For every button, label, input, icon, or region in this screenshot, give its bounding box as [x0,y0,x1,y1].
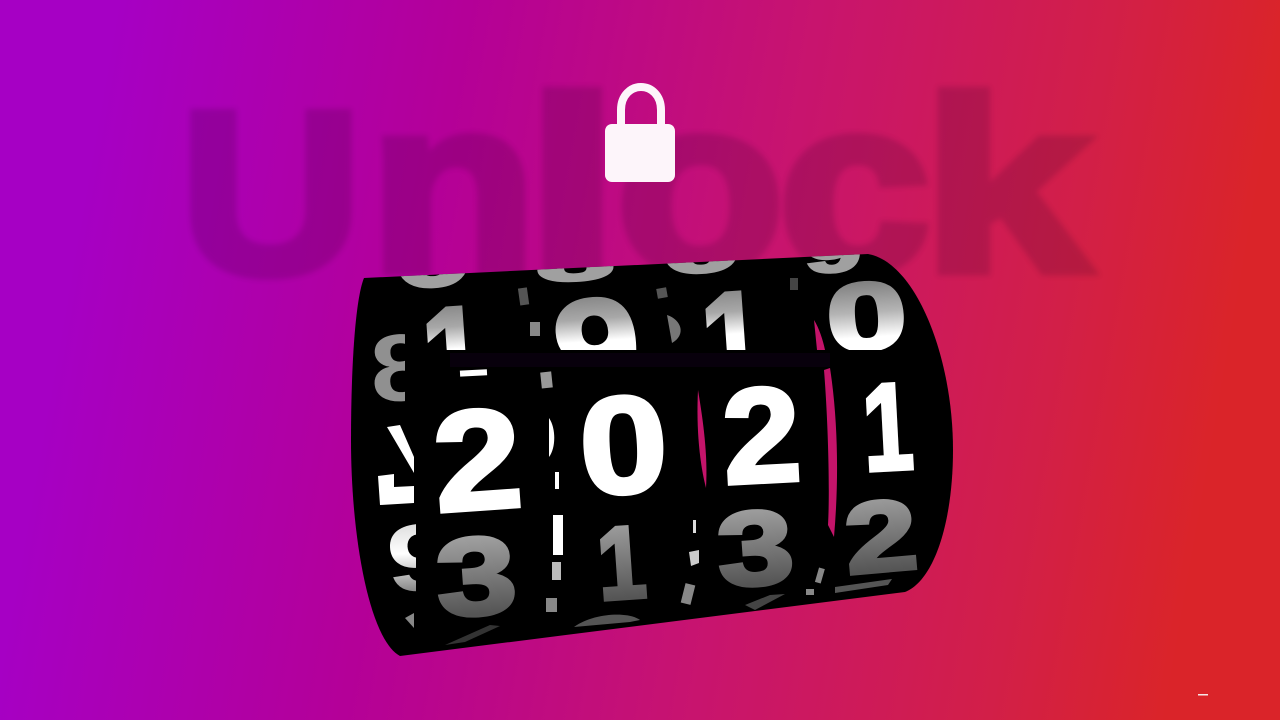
heading: Unlock ghost word: U [180,64,362,323]
center row digits 2 0 2 1: 0 [576,367,671,525]
partially hidden digits: top edge row [400,254,860,288]
small slivers between reels [405,278,892,645]
center row digits 2 0 2 1: 1 [859,358,916,498]
upper row digits 1 9 1 0 [426,280,904,350]
heading: Unlock ghost word: o [616,46,785,324]
heading: Unlock ghost word: c [778,46,931,324]
icon: padlock [605,87,675,182]
dark band across reels [450,353,830,367]
upper row digits 1 9 1 0: 1 [417,277,490,432]
reel gap slits [697,320,837,537]
combination cylinder [351,254,953,656]
heading: Unlock ghost word [180,46,1091,324]
small white dash marker [1198,694,1208,696]
partially hidden digits: top edge row: 8 [534,224,616,295]
partially hidden digits: top edge row: 0 [390,208,475,307]
heading: Unlock ghost word: k [922,46,1091,324]
left reel slivers [374,334,416,592]
heading: Unlock ghost word: n [369,46,537,324]
center row digits 2 0 2 1: 2 [719,358,804,513]
partially hidden digits: top edge row: 9 [803,220,863,285]
lower row digits 3 1 3 2: 2 [840,478,922,596]
center row digits 2 0 2 1: 2 [428,378,527,543]
upper row digits 1 9 1 0: 9 [548,268,645,425]
partially hidden digits: top edge row: 0 [660,216,742,287]
upper row digits 1 9 1 0: 1 [696,262,769,417]
left reel slivers: 9 [384,503,459,613]
upper row digits 1 9 1 0: 0 [823,262,910,373]
heading: Unlock ghost word: l [525,46,620,324]
center row digits 2 0 2 1 [436,382,914,514]
left reel digit fragment [378,425,414,505]
lower row digits 3 1 3 2: 3 [713,488,797,610]
left reel slivers: 8 [368,314,435,423]
lower row digits 3 1 3 2: 3 [432,513,520,641]
cylinder body [351,254,953,656]
lower row digits 3 1 3 2: 1 [594,504,649,622]
lower row digits 3 1 3 2 [437,499,918,618]
